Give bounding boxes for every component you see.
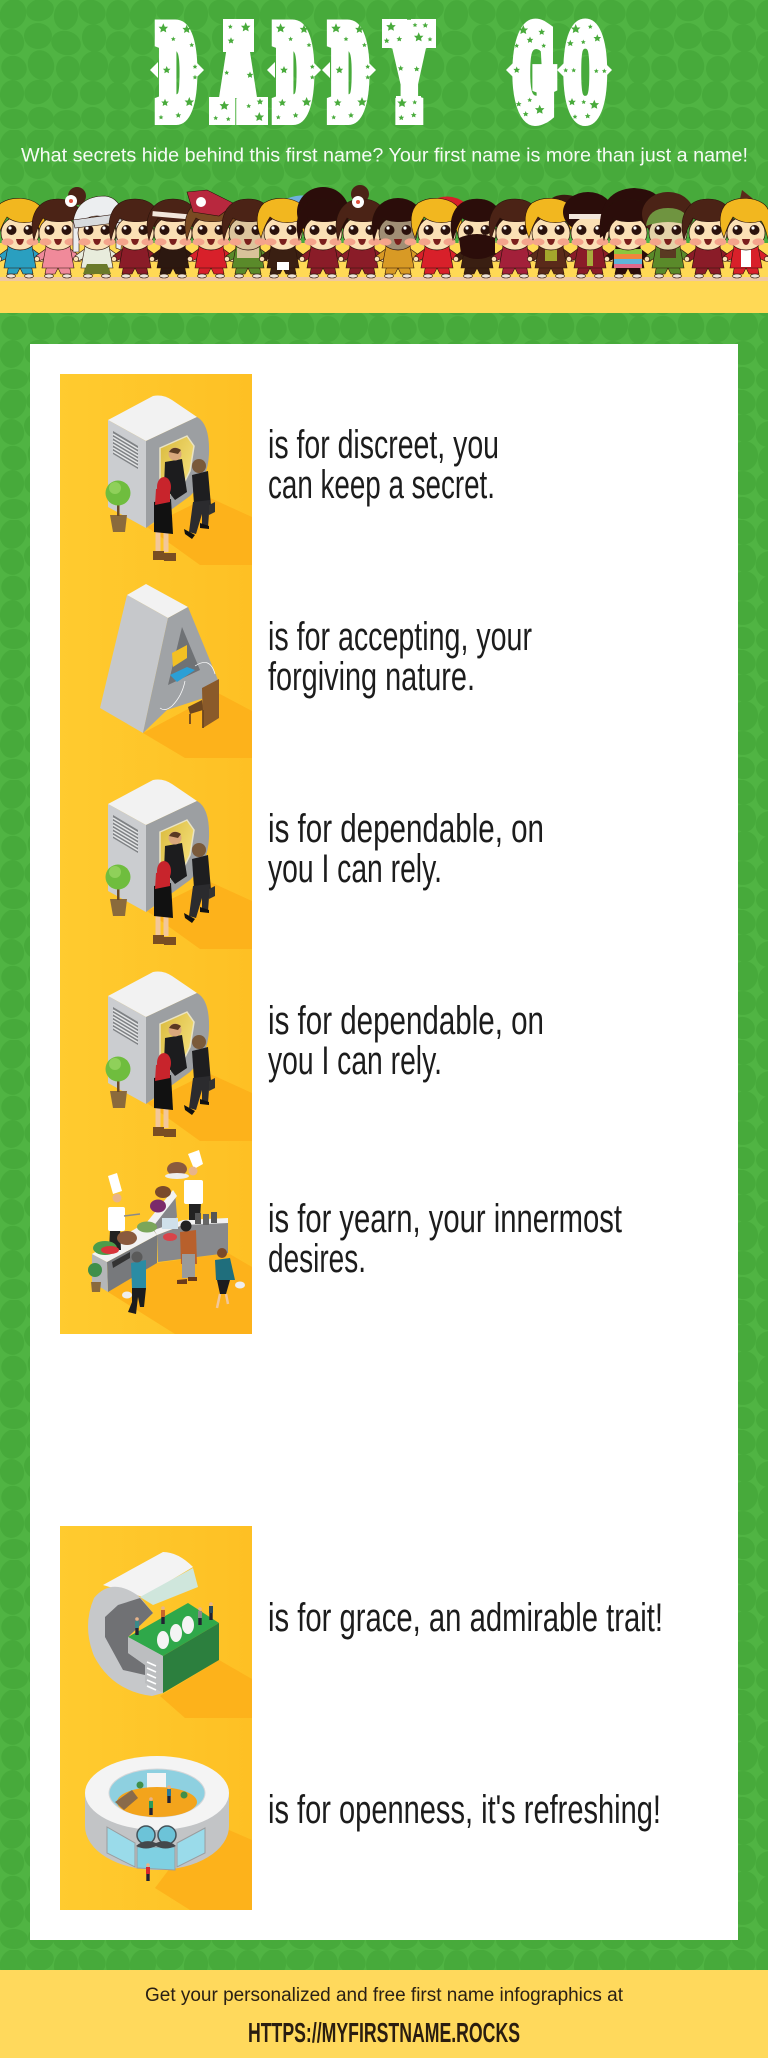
character 11 (372, 198, 424, 278)
text: dependable: you I can rely. (268, 847, 442, 891)
character 17 (600, 188, 660, 278)
text: yearn: desires. (268, 1237, 366, 1281)
text: accepting: forgiving nature. (268, 655, 475, 699)
row: Y yearn (88, 1150, 622, 1334)
text: dependable: is for dependable, on (268, 807, 544, 851)
character 3 (73, 196, 123, 278)
row: D discreet (106, 396, 499, 565)
character 10 (336, 185, 388, 278)
character 5 (147, 199, 199, 278)
panel: name letters (30, 344, 738, 1940)
text: dependable: you I can rely. (268, 1039, 442, 1083)
icon: letter G building (88, 1552, 252, 1718)
subtitle: What secrets hide behind this first name? Your first name is more than just a name! (21, 146, 748, 166)
character 2 (32, 187, 86, 278)
icon: letter O building (85, 1756, 252, 1910)
character 8 (257, 195, 323, 278)
character 20 (720, 190, 768, 278)
character 15 (525, 195, 579, 278)
row: D dependable (106, 780, 544, 949)
character 6 (185, 190, 237, 278)
character 16 (563, 192, 614, 278)
row: O openness (85, 1756, 661, 1910)
icon: letter A building (100, 584, 252, 758)
footer text: Get your personalized and free first name infographics at (145, 1985, 624, 2006)
banner: parade of characters (0, 185, 768, 313)
title: DADDY GO: DADDY GO (159, 4, 605, 141)
text: discreet: is for discreet, you (268, 423, 499, 467)
character 19 (682, 199, 734, 278)
character 4 (109, 199, 161, 278)
footer link: HTTPS://MYFIRSTNAME.ROCKS (248, 2017, 520, 2048)
character 18 (642, 192, 694, 278)
icon: buffet counter (88, 1150, 252, 1334)
text: discreet: can keep a secret. (268, 463, 495, 507)
character 12 (411, 196, 467, 278)
icon: letter D building (106, 780, 252, 949)
character 13 (451, 199, 503, 278)
row: G grace (88, 1552, 663, 1718)
icon: letter D building (106, 396, 252, 565)
icon: letter D building (106, 972, 252, 1141)
row: A accepting (100, 584, 532, 758)
character 14 (489, 199, 541, 278)
text: dependable: is for dependable, on (268, 999, 544, 1043)
text: yearn: is for yearn, your innermost (268, 1197, 622, 1241)
footer (0, 1970, 768, 2058)
character 1 (0, 198, 45, 278)
row: D dependable second (106, 972, 544, 1141)
character 7 (222, 199, 274, 278)
text: accepting: is for accepting, your (268, 615, 532, 659)
header (21, 4, 748, 166)
character 9 (297, 187, 349, 278)
